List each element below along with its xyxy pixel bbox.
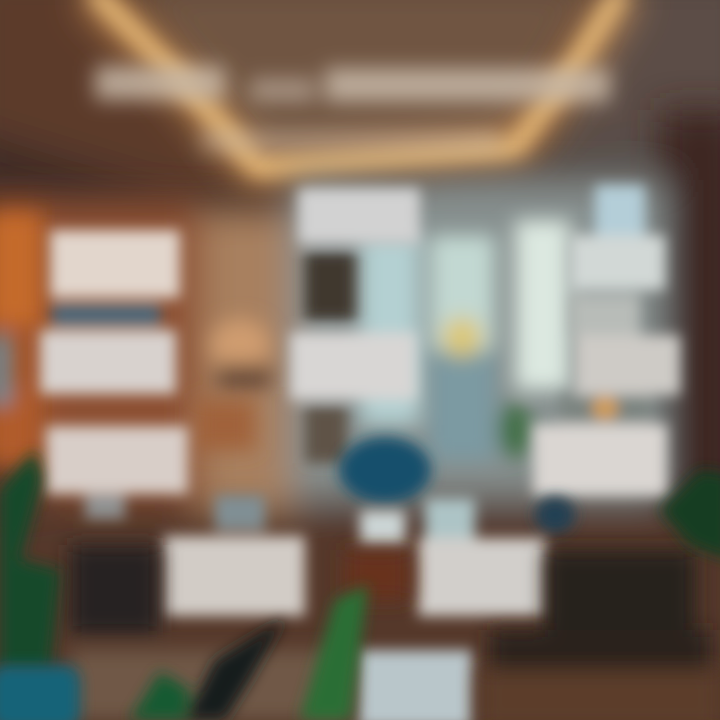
centre panels bbox=[290, 188, 420, 463]
blue planter bbox=[0, 665, 80, 720]
plants bbox=[0, 450, 720, 720]
ceiling bbox=[0, 0, 720, 230]
blue armchair bbox=[339, 437, 575, 533]
left panels bbox=[40, 230, 188, 519]
right panels bbox=[533, 185, 680, 496]
ceiling light strip bbox=[92, 0, 622, 168]
window area bbox=[360, 220, 570, 460]
bottom panels bbox=[163, 495, 546, 720]
middle column lamp bbox=[195, 319, 270, 450]
dark sofas and red table bbox=[70, 545, 720, 720]
left orange wall bbox=[0, 215, 40, 460]
ceiling light glow bbox=[90, 0, 625, 170]
blurred heading band bbox=[95, 66, 610, 152]
